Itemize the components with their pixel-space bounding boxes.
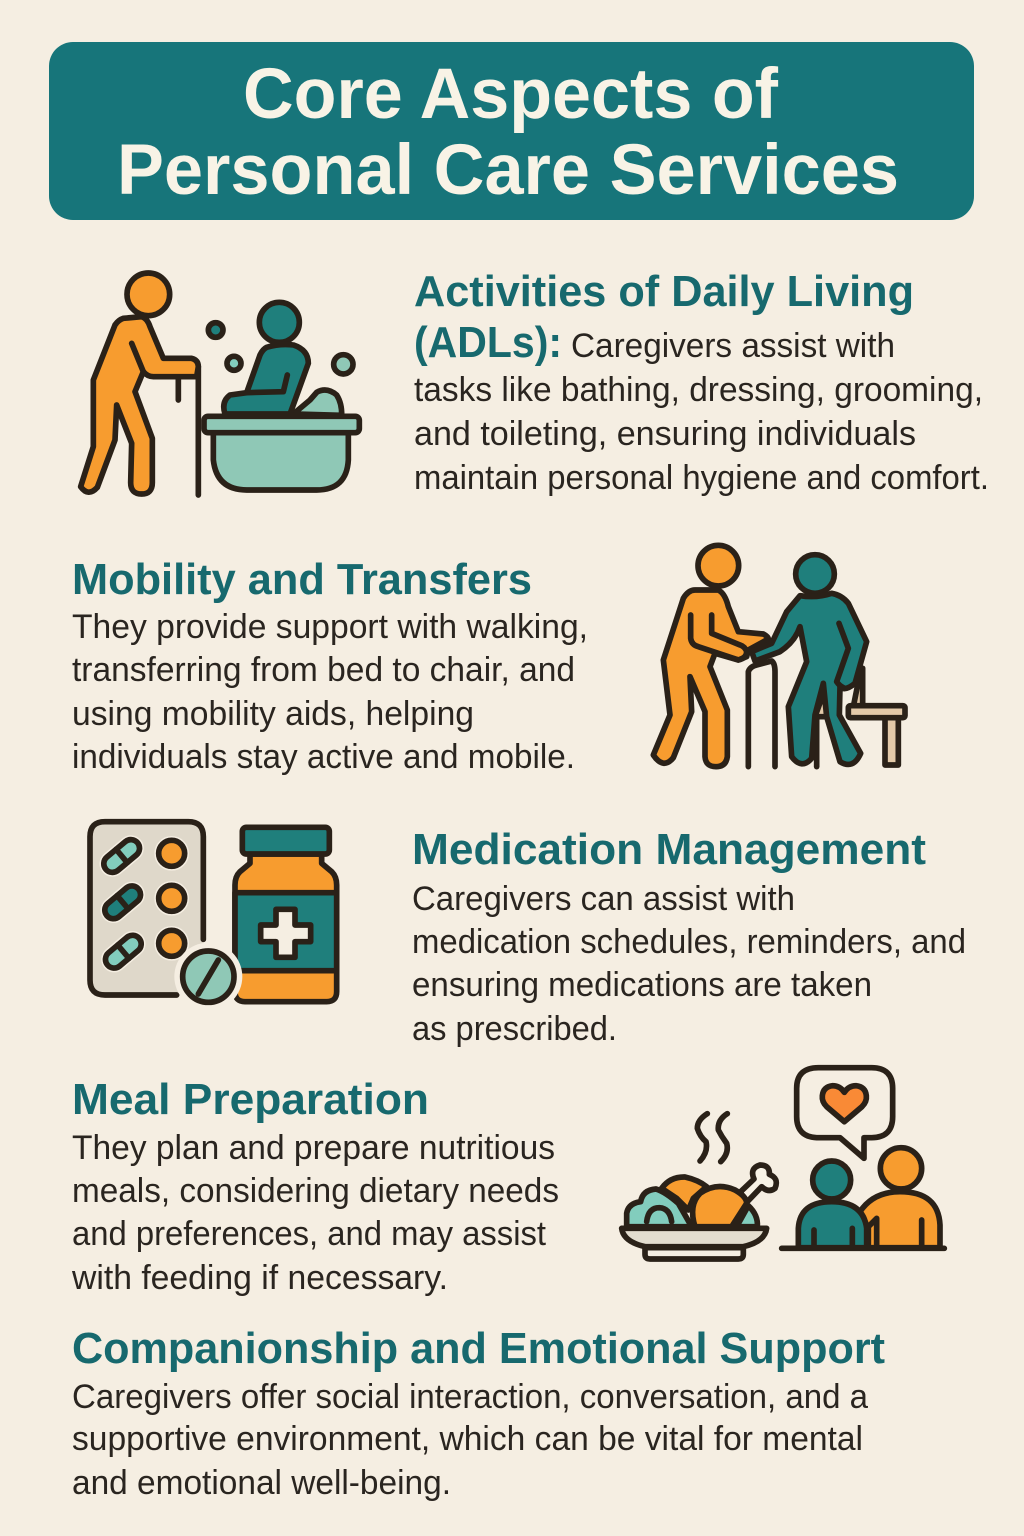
icon: medication blister pack and bottle (90, 822, 337, 1011)
text: medication management: Medication Management (412, 825, 926, 874)
title banner: Core Aspects of (243, 55, 778, 134)
icon: hot meal and companions with heart speech bubble (622, 1068, 944, 1259)
text: activities of daily living (414, 267, 989, 497)
text: activities of daily living: Activities of Daily Living (414, 267, 914, 316)
text: companionship and emotional support: Caregivers offer social interaction, conversation, and a (72, 1378, 868, 1416)
title banner: Personal Care Services (117, 131, 899, 210)
text: mobility and transfers: transferring from bed to chair, and (72, 651, 575, 689)
text: companionship and emotional support: Companionship and Emotional Support (72, 1324, 885, 1373)
text: activities of daily living: tasks like bathing, dressing, grooming, (414, 371, 983, 409)
text: mobility and transfers: They provide support with walking, (72, 608, 588, 646)
text: companionship and emotional support: supportive environment, which can be vital for mental (72, 1420, 863, 1458)
text: mobility and transfers: individuals stay active and mobile. (72, 738, 575, 776)
text: meal preparation (71, 1075, 559, 1297)
text: meal preparation: Meal Preparation (72, 1075, 429, 1124)
text: mobility and transfers: using mobility aids, helping (72, 695, 474, 733)
icon: caregiver helping person bathe (81, 273, 359, 495)
text: activities of daily living: maintain personal hygiene and comfort. (414, 459, 989, 497)
icon: caregiver supporting person with walker (653, 545, 905, 767)
text: meal preparation: and preferences, and may assist (72, 1215, 547, 1253)
text: medication management: as prescribed. (412, 1010, 617, 1048)
text: companionship and emotional support (72, 1324, 885, 1502)
text: companionship and emotional support: and emotional well-being. (72, 1464, 451, 1502)
text: activities of daily living: (ADLs): (414, 318, 562, 367)
text: meal preparation: with feeding if necessary. (71, 1259, 448, 1297)
text: meal preparation: They plan and prepare nutritious (72, 1129, 555, 1167)
text: activities of daily living: and toileting, ensuring individuals (414, 415, 916, 453)
text: medication management: Caregivers can assist with (412, 880, 795, 918)
text: mobility and transfers: Mobility and Transfers (72, 555, 532, 604)
title banner (49, 42, 974, 220)
text: mobility and transfers (72, 555, 588, 776)
text: medication management (412, 825, 966, 1048)
text: medication management: medication schedules, reminders, and (412, 923, 966, 961)
text: activities of daily living: Caregivers assist with (571, 327, 895, 365)
text: meal preparation: meals, considering dietary needs (72, 1172, 559, 1210)
text: medication management: ensuring medications are taken (412, 966, 872, 1004)
